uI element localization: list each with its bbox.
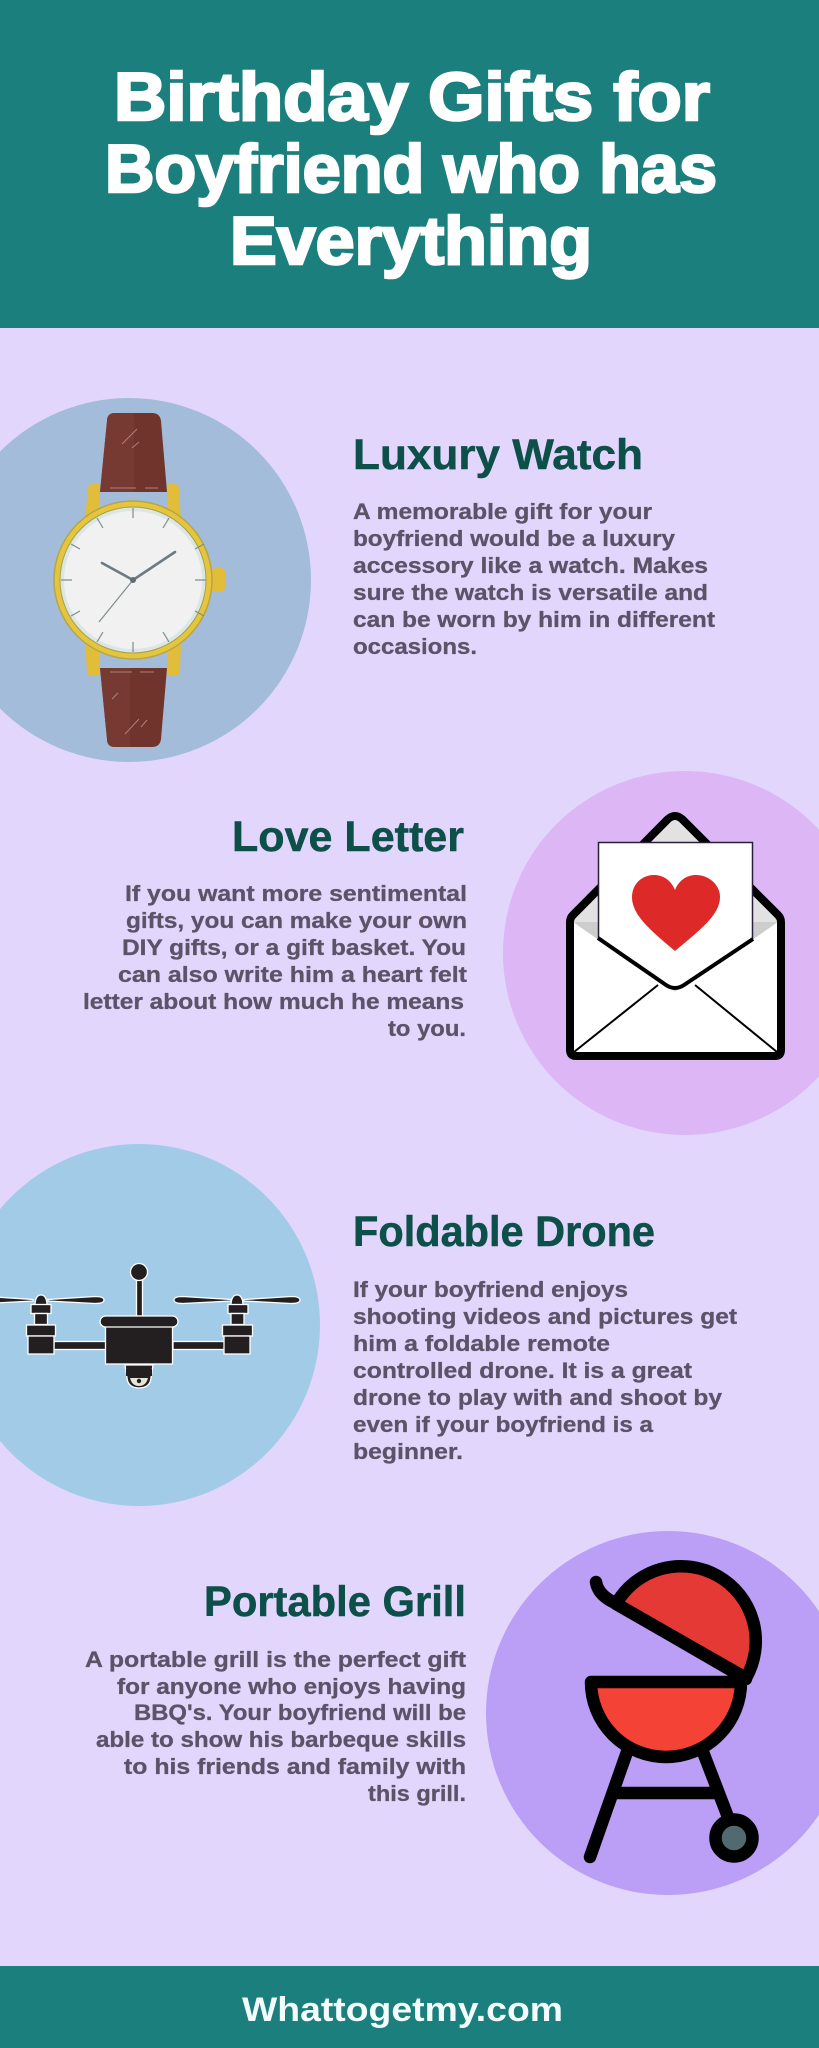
text block: letter description: gifts, you can make your own bbox=[126, 908, 467, 933]
text block: grill description: able to show his barbeque skills bbox=[96, 1727, 466, 1752]
text block: watch description: can be worn by him in different bbox=[353, 607, 716, 632]
panel: love letter bbox=[83, 771, 819, 1135]
icon: drone bbox=[0, 1264, 300, 1388]
text block: watch description: occasions. bbox=[353, 634, 477, 659]
title bbox=[105, 59, 717, 279]
panel: foldable drone bbox=[0, 1144, 738, 1506]
text block: drone description: drone to play with and shoot by bbox=[353, 1385, 723, 1410]
text block: drone description: even if your boyfriend is a bbox=[353, 1412, 654, 1437]
footer band bbox=[0, 1966, 819, 2048]
heading: Foldable Drone: Foldable Drone bbox=[353, 1208, 655, 1256]
text block: drone description: If your boyfriend enjoys bbox=[353, 1277, 628, 1302]
text block: grill description: for anyone who enjoys having bbox=[117, 1674, 466, 1699]
text block: grill description: A portable grill is the perfect gift bbox=[85, 1647, 467, 1672]
text block: grill description bbox=[85, 1647, 467, 1806]
icon circle: watch background bbox=[0, 398, 311, 762]
footer website text: Whattogetmy.com bbox=[242, 1991, 563, 2029]
text block: letter description: to you. bbox=[388, 1016, 466, 1041]
header band bbox=[0, 0, 819, 328]
icon: envelope with heart bbox=[570, 816, 781, 1056]
title: Boyfriend who has bbox=[105, 131, 717, 207]
text block: watch description: accessory like a watch. Makes bbox=[353, 553, 708, 578]
icon circle: drone background bbox=[0, 1144, 320, 1506]
text block: watch description bbox=[353, 499, 716, 659]
heading: Portable Grill: Portable Grill bbox=[204, 1578, 466, 1626]
title: Everything bbox=[230, 203, 592, 279]
icon circle: letter background bbox=[503, 771, 819, 1135]
icon: wristwatch bbox=[54, 413, 225, 747]
text block: letter description bbox=[83, 881, 468, 1041]
text block: drone description bbox=[353, 1277, 738, 1464]
icon circle: grill background bbox=[486, 1531, 819, 1895]
icon: barbecue grill bbox=[590, 1566, 756, 1857]
text block: watch description: boyfriend would be a luxury bbox=[353, 526, 676, 551]
text block: grill description: BBQ's. Your boyfriend will be bbox=[134, 1700, 466, 1725]
heading: Luxury Watch: Luxury Watch bbox=[353, 431, 643, 479]
text block: letter description: DIY gifts, or a gift basket. You bbox=[122, 935, 466, 960]
text block: watch description: sure the watch is versatile and bbox=[353, 580, 708, 605]
panel: luxury watch bbox=[0, 398, 716, 762]
panel: portable grill bbox=[85, 1531, 819, 1895]
title: Birthday Gifts for bbox=[114, 59, 710, 135]
text block: grill description: this grill. bbox=[368, 1781, 466, 1806]
text block: drone description: beginner. bbox=[353, 1439, 463, 1464]
text block: letter description: letter about how much he means bbox=[83, 989, 464, 1014]
text block: letter description: If you want more sentimental bbox=[125, 881, 467, 906]
text block: drone description: controlled drone. It is a great bbox=[353, 1358, 693, 1383]
text block: grill description: to his friends and family with bbox=[124, 1754, 466, 1779]
text block: drone description: him a foldable remote bbox=[353, 1331, 610, 1356]
text block: watch description: A memorable gift for your bbox=[353, 499, 652, 524]
text block: drone description: shooting videos and pictures get bbox=[353, 1304, 738, 1329]
heading: Love Letter: Love Letter bbox=[232, 813, 464, 861]
text block: letter description: can also write him a heart felt bbox=[118, 962, 468, 987]
